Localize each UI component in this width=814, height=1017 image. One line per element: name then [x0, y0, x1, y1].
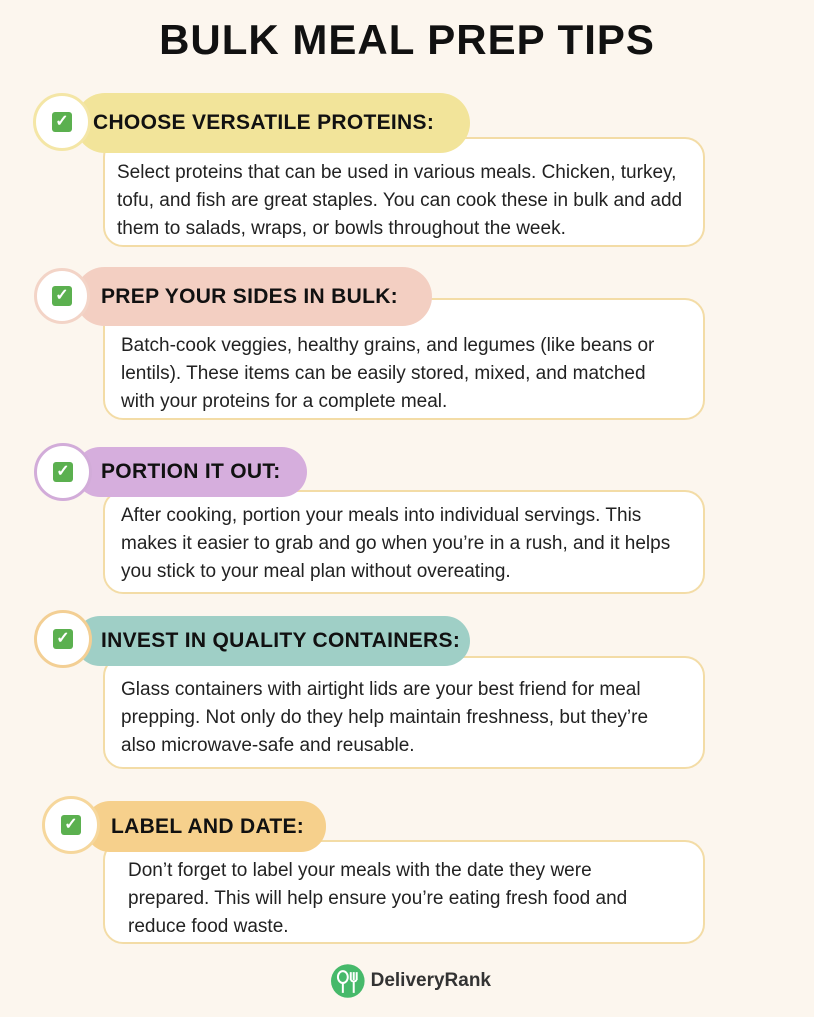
heading pill 4 — [75, 616, 470, 666]
text card 3: you stick to your meal plan without overeating. — [121, 561, 511, 582]
icon: check 3: ✓ — [56, 463, 70, 480]
text card 3: After cooking, portion your meals into individual servings. This — [121, 505, 641, 526]
icon: logo — [331, 964, 365, 998]
text card 4: Glass containers with airtight lids are your best friend for meal — [121, 679, 641, 700]
logo: DeliveryRank — [331, 964, 491, 998]
heading pill 3 — [75, 447, 307, 497]
icon: check 1: ✓ — [55, 113, 69, 130]
icon: check 4: ✓ — [56, 630, 70, 647]
heading pill 3: PORTION IT OUT: — [101, 460, 280, 483]
text card 2: lentils). These items can be easily stored, mixed, and matched — [121, 363, 646, 384]
panel: label and date — [42, 796, 705, 944]
text card 4 — [103, 656, 705, 769]
icon: check 3 — [34, 443, 92, 501]
text card 5: Don’t forget to label your meals with the date they were — [128, 860, 592, 881]
icon: check 2 — [34, 268, 90, 324]
text card 4: prepping. Not only do they help maintain freshness, but they’re — [121, 707, 648, 728]
heading pill 1: CHOOSE VERSATILE PROTEINS: — [93, 111, 434, 134]
text card 1: them to salads, wraps, or bowls throughout the week. — [117, 218, 566, 239]
text card 2 — [103, 298, 705, 420]
text card 3 — [103, 490, 705, 594]
icon: check 5: ✓ — [64, 816, 78, 833]
panel: invest in containers — [34, 610, 705, 769]
text card 5: reduce food waste. — [128, 916, 289, 937]
text card 5: prepared. This will help ensure you’re eating fresh food and — [128, 888, 627, 909]
panel: prep sides — [34, 267, 705, 420]
heading pill 5 — [85, 801, 326, 852]
text card 1 — [103, 137, 705, 247]
logo: DeliveryRank: DeliveryRank — [371, 970, 491, 991]
text card 1: Select proteins that can be used in various meals. Chicken, turkey, — [117, 162, 676, 183]
icon: check 2: ✓ — [55, 287, 69, 304]
heading pill 1 — [75, 93, 470, 153]
text card 2: with your proteins for a complete meal. — [121, 391, 447, 412]
heading pill 5: LABEL AND DATE: — [111, 814, 304, 838]
icon: check 1 — [33, 93, 91, 151]
panel: choose versatile proteins — [33, 93, 705, 247]
title: BULK MEAL PREP TIPS — [159, 16, 655, 63]
text card 1: tofu, and fish are great staples. You can cook these in bulk and add — [117, 190, 682, 211]
text card 2: Batch-cook veggies, healthy grains, and legumes (like beans or — [121, 335, 654, 356]
icon: check 5 — [42, 796, 100, 854]
heading pill 4: INVEST IN QUALITY CONTAINERS: — [101, 629, 460, 652]
panel: portion it out — [34, 443, 705, 594]
icon: check 4 — [34, 610, 92, 668]
text card 5 — [103, 840, 705, 944]
text card 3: makes it easier to grab and go when you’re in a rush, and it helps — [121, 533, 670, 554]
heading pill 2: PREP YOUR SIDES IN BULK: — [101, 284, 398, 308]
text card 4: also microwave-safe and reusable. — [121, 735, 415, 756]
heading pill 2 — [75, 267, 432, 326]
